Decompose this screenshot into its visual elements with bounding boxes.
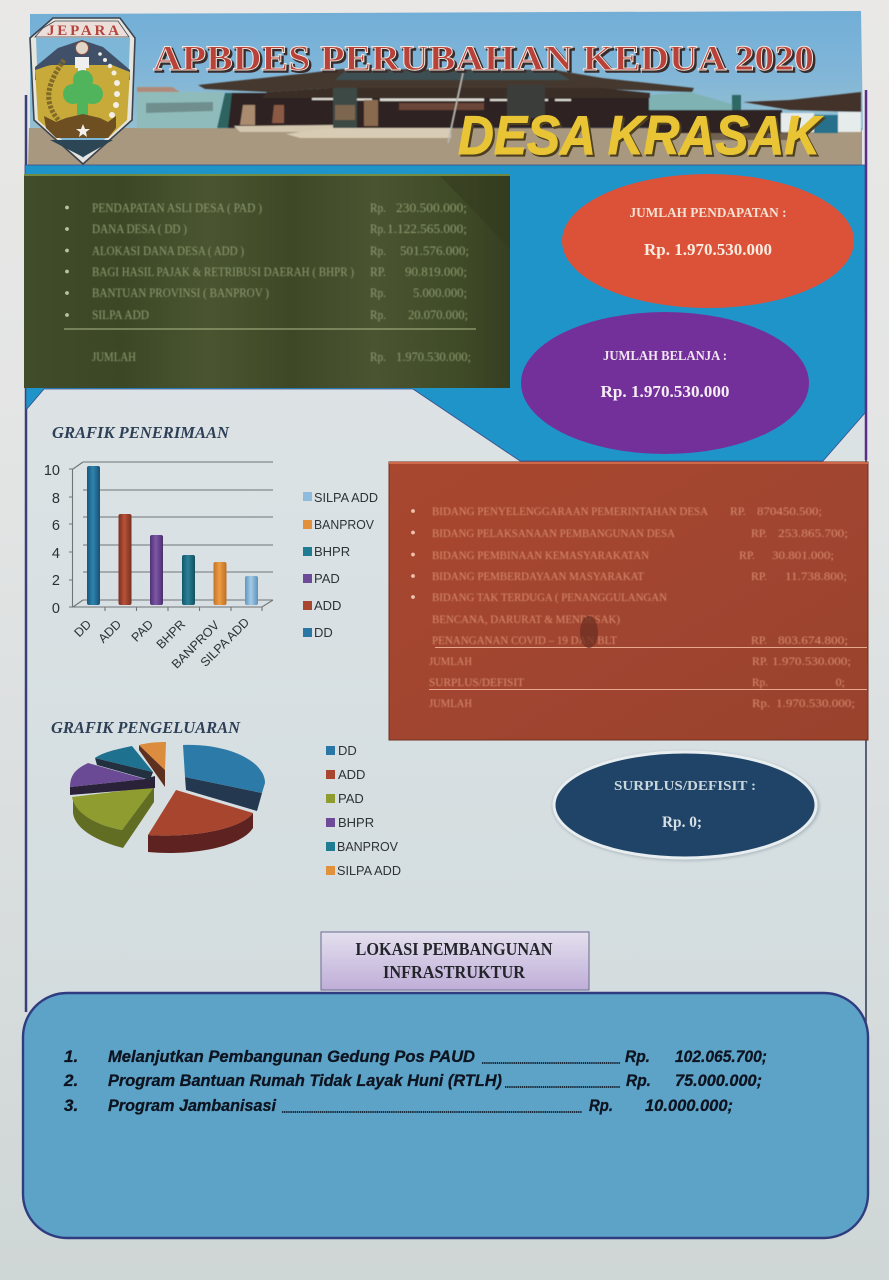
legend: pengeluaran: BHPR <box>338 815 374 830</box>
legend: pengeluaran: PAD <box>338 791 364 806</box>
x axis labels: PAD <box>129 617 156 645</box>
pendapatan rows: 501.576.000; <box>400 244 469 258</box>
slice: DD <box>183 745 265 811</box>
belanja rows: BIDANG TAK TERDUGA ( PENANGGULANGAN <box>432 590 667 604</box>
belanja rows <box>429 504 855 710</box>
pendapatan rows: 90.819.000; <box>405 265 467 279</box>
heading: grafik pengeluaran: GRAFIK PENGELUARAN <box>51 718 241 737</box>
belanja rows: JUMLAH <box>429 696 472 710</box>
pendapatan rows: PENDAPATAN ASLI DESA ( PAD ) <box>92 201 262 215</box>
x axis labels: BANPROV <box>169 618 223 671</box>
pendapatan rows: Rp. <box>370 222 386 236</box>
legend: pengeluaran: BANPROV <box>337 839 398 854</box>
tower and star <box>75 42 89 74</box>
pendapatan rows: 20.070.000; <box>408 308 468 322</box>
list rows <box>63 1047 767 1115</box>
list rows: Program Bantuan Rumah Tidak Layak Huni (RTLH) <box>108 1071 502 1090</box>
legend: penerimaan: DD <box>314 625 333 640</box>
y axis labels: 8 <box>52 491 60 507</box>
pendapatan rows: DANA DESA ( DD ) <box>92 222 187 236</box>
icon: Jepara coat of arms: JEPARA <box>47 23 119 39</box>
belanja bullets <box>411 509 415 599</box>
legend: penerimaan <box>303 490 378 640</box>
callout: jumlah pendapatan: JUMLAH PENDAPATAN : <box>630 205 786 220</box>
list rows: 3. <box>64 1096 78 1115</box>
belanja rows: BIDANG PELAKSANAAN PEMBANGUNAN DESA <box>432 526 675 540</box>
belanja rows: 253.865.700; <box>778 526 848 540</box>
list rows: 10.000.000; <box>645 1096 733 1115</box>
belanja rows: PENANGANAN COVID – 19 DAN BLT <box>432 633 618 647</box>
callout: jumlah pendapatan: Rp. 1.970.530.000 <box>644 240 772 259</box>
y axis labels <box>44 463 60 617</box>
list rows: 2. <box>63 1071 78 1090</box>
belanja rows: RP. <box>751 526 767 540</box>
pendapatan rows: 1.970.530.000; <box>396 350 471 364</box>
pendapatan rows: Rp. <box>370 350 386 364</box>
x axis labels: ADD <box>96 617 124 646</box>
box: lokasi pembangunan infrastruktur: LOKASI PEMBANGUNAN <box>356 939 553 959</box>
belanja rows: 1.970.530.000; <box>772 654 851 668</box>
belanja rows: BIDANG PENYELENGGARAAN PEMERINTAHAN DESA <box>432 504 708 518</box>
belanja rows: RP. <box>730 504 746 518</box>
x axis labels: BHPR <box>154 617 188 652</box>
mountain <box>35 40 130 80</box>
pendapatan rows: Rp. <box>370 244 386 258</box>
x axis labels: SILPA ADD <box>198 615 252 670</box>
belanja rows: 870450.500; <box>757 504 822 518</box>
banner ground <box>28 128 862 166</box>
list rows: Program Jambanisasi <box>108 1096 277 1115</box>
pendapatan rows: 5.000.000; <box>413 286 467 300</box>
banner building <box>137 69 861 143</box>
callout: jumlah belanja: JUMLAH BELANJA : <box>603 348 727 363</box>
paddy <box>49 60 64 122</box>
list rows: Rp. <box>626 1071 651 1090</box>
pendapatan rows: JUMLAH <box>92 350 136 364</box>
panel: pendapatan <box>24 174 510 388</box>
legend: penerimaan: BHPR <box>314 544 350 559</box>
pendapatan rows: Rp. <box>370 286 386 300</box>
belanja rows: 30.801.000; <box>772 548 834 562</box>
belanja rows: Rp. <box>752 675 768 689</box>
panel: belanja <box>389 462 868 740</box>
belanja rows: RP. <box>751 633 767 647</box>
callout: surplus defisit: SURPLUS/DEFISIT : <box>614 779 756 794</box>
belanja rows: JUMLAH <box>429 654 472 668</box>
base ornament <box>44 114 116 138</box>
subtitle: DESA KRASAK: DESA KRASAK <box>460 106 826 168</box>
list rows: 102.065.700; <box>675 1047 767 1066</box>
pendapatan bullets <box>65 206 69 317</box>
cotton dots <box>98 52 120 118</box>
legend: pengeluaran: DD <box>338 743 357 758</box>
callout: jumlah belanja: Rp. 1.970.530.000 <box>600 382 730 401</box>
pie chart: pengeluaran <box>70 742 265 853</box>
belanja rows: 1.970.530.000; <box>776 696 855 710</box>
yellow field <box>35 65 130 138</box>
banner sky <box>30 11 863 130</box>
pendapatan rows: BAGI HASIL PAJAK & RETRIBUSI DAERAH ( BHPR ) <box>92 265 354 279</box>
y axis labels: 0 <box>52 601 60 617</box>
legend: pengeluaran <box>326 743 401 878</box>
legend: pengeluaran: ADD <box>338 767 365 782</box>
y axis labels: 4 <box>52 546 60 562</box>
pendapatan rows: 1.122.565.000; <box>387 222 467 236</box>
pendapatan rows: 230.500.000; <box>396 201 467 215</box>
list rows: Rp. <box>589 1096 613 1115</box>
x axis labels <box>71 615 252 671</box>
pendapatan rows: BANTUAN PROVINSI ( BANPROV ) <box>92 286 269 300</box>
panel: infrastruktur list <box>23 993 868 1238</box>
belanja rows: RP. <box>751 569 767 583</box>
pendapatan rows: ALOKASI DANA DESA ( ADD ) <box>92 244 244 258</box>
list rows: 1. <box>64 1047 78 1066</box>
pendapatan rows: RP. <box>370 265 386 279</box>
belanja rows: RP. <box>739 548 755 562</box>
slice: BHPR <box>70 763 155 795</box>
belanja rows: 0; <box>836 675 845 689</box>
blue backdrop shape <box>25 165 865 461</box>
legend: penerimaan: SILPA ADD <box>314 490 378 505</box>
title: APBDES PERUBAHAN KEDUA 2020: APBDES PERUBAHAN KEDUA 2020 <box>155 40 816 80</box>
title: APBDES PERUBAHAN KEDUA 2020: APBDES PERUBAHAN KEDUA 2020 <box>153 38 814 78</box>
tree <box>63 70 103 117</box>
banner JEPARA <box>35 21 129 37</box>
belanja rows: BIDANG PEMBERDAYAAN MASYARAKAT <box>432 569 645 583</box>
heading: grafik penerimaan: GRAFIK PENERIMAAN <box>52 423 230 442</box>
y axis labels: 10 <box>44 463 60 479</box>
pendapatan rows <box>92 201 471 364</box>
slice: PAD <box>72 787 154 848</box>
list rows: Melanjutkan Pembangunan Gedung Pos PAUD <box>108 1047 475 1066</box>
belanja rows: 803.674.800; <box>778 633 848 647</box>
callout: surplus defisit: Rp. 0; <box>662 814 702 831</box>
sea <box>50 140 113 157</box>
belanja rows: Rp. <box>752 696 770 710</box>
callout: jumlah belanja <box>521 312 809 454</box>
belanja rows: 11.738.800; <box>785 569 847 583</box>
legend: pengeluaran: SILPA ADD <box>337 863 401 878</box>
belanja rows: BENCANA, DARURAT & MENDESAK) <box>432 612 620 626</box>
subtitle: DESA KRASAK: DESA KRASAK <box>458 104 824 166</box>
bar chart: penerimaan <box>44 462 273 671</box>
y axis labels: 6 <box>52 518 60 534</box>
legend: penerimaan: BANPROV <box>314 517 374 532</box>
callout: surplus defisit <box>552 751 820 861</box>
belanja rows: SURPLUS/DEFISIT <box>429 675 525 689</box>
slice: ADD <box>148 790 253 853</box>
box: lokasi pembangunan infrastruktur: INFRASTRUKTUR <box>383 962 525 982</box>
pendapatan rows: SILPA ADD <box>92 308 149 322</box>
callout: jumlah pendapatan <box>562 174 854 308</box>
list rows: 75.000.000; <box>675 1071 762 1090</box>
belanja rows: BIDANG PEMBINAAN KEMASYARAKATAN <box>432 548 649 562</box>
page frame <box>26 90 866 1100</box>
icon: Jepara coat of arms <box>30 18 135 164</box>
bars <box>87 466 258 605</box>
pendapatan rows: Rp. <box>370 308 386 322</box>
box: lokasi pembangunan infrastruktur <box>321 932 589 990</box>
y axis labels: 2 <box>52 573 60 589</box>
x axis labels: DD <box>71 617 94 640</box>
legend: penerimaan: PAD <box>314 571 340 586</box>
slice: SILPA ADD <box>139 742 166 787</box>
slice: BANPROV <box>95 746 153 780</box>
legend: penerimaan: ADD <box>314 598 341 613</box>
belanja rows: RP. <box>752 654 768 668</box>
pendapatan rows: Rp. <box>370 201 386 215</box>
header banner <box>28 11 863 168</box>
list rows: Rp. <box>625 1047 650 1066</box>
